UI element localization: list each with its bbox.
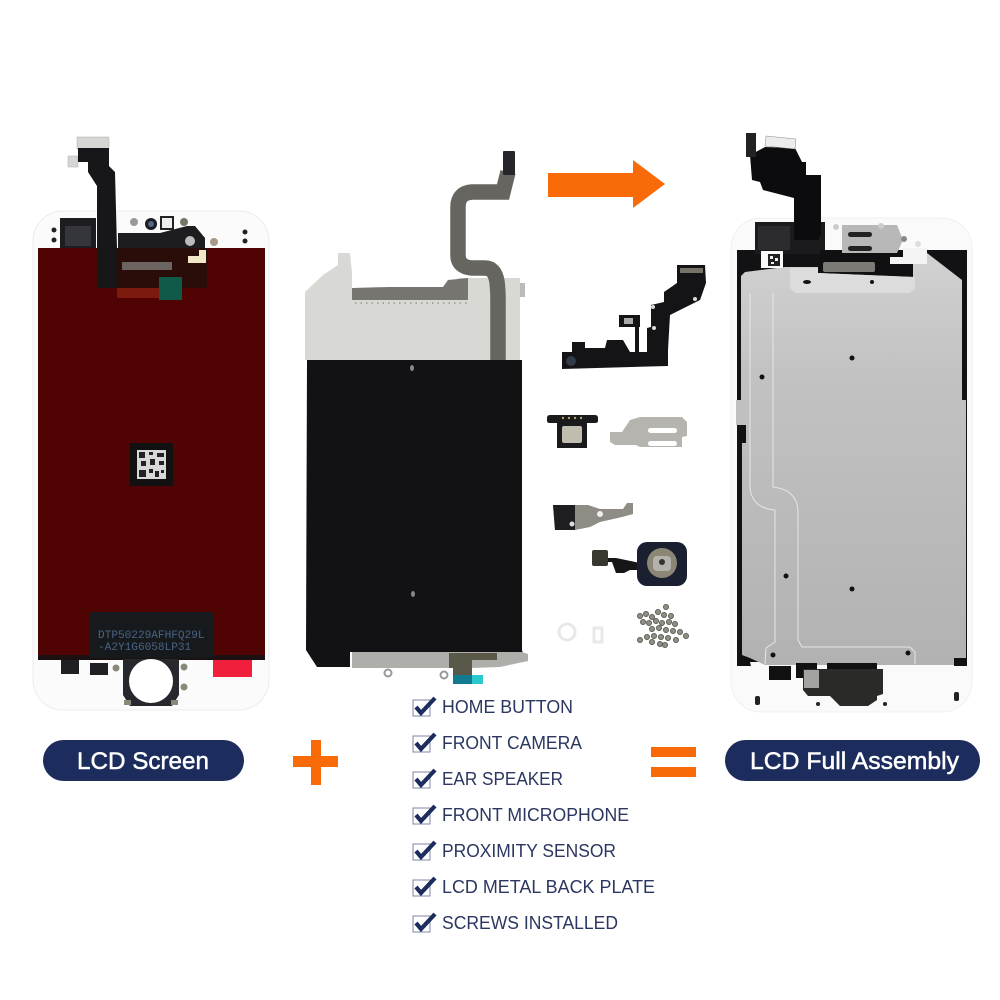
grey flex cable [458, 172, 508, 360]
dotted rivets [355, 302, 467, 304]
green tab [159, 277, 182, 300]
pink tab [213, 660, 252, 677]
home board [803, 669, 883, 706]
panel: LCD full assembly phone [731, 133, 972, 712]
connector [122, 262, 172, 270]
QR label [130, 443, 173, 486]
panel: metal back plate [305, 151, 528, 684]
home button opening [129, 659, 173, 703]
bottom flex [449, 653, 497, 675]
badge: LCD Full Assembly [725, 740, 980, 781]
screws [637, 604, 689, 648]
item: screws installed: SCREWS INSTALLED [442, 913, 618, 933]
serial number label: -A2Y1G6058LP31 [98, 642, 192, 654]
grey inset [352, 278, 468, 300]
front camera flex [562, 265, 706, 369]
textured speaker patch [65, 226, 91, 246]
bottom black blocks [769, 663, 877, 680]
bottom black tabs [61, 660, 108, 675]
plastic ring and frame [559, 624, 602, 642]
panel: loose parts [547, 265, 706, 648]
badge: LCD Screen: LCD Screen [77, 748, 209, 775]
black back area [737, 250, 967, 662]
small screws [112, 664, 188, 705]
home button surround [123, 659, 179, 706]
silver plate [305, 253, 520, 360]
plate holes [410, 365, 415, 597]
teal tab [453, 675, 483, 684]
silver contour lines [750, 293, 915, 664]
bottom ring tabs [384, 670, 448, 678]
flex white connector [765, 136, 796, 149]
textured speaker patch [758, 226, 790, 250]
badge: LCD Full Assembly: LCD Full Assembly [750, 748, 959, 775]
home bracket [553, 503, 633, 530]
home button [592, 542, 687, 586]
bottom black corners [737, 658, 967, 666]
badge: LCD Screen [43, 740, 244, 781]
plus sign [293, 740, 338, 785]
serial number label [90, 612, 213, 658]
top black shield [60, 218, 205, 248]
item: front camera: FRONT CAMERA [442, 733, 582, 753]
small holes [755, 692, 959, 706]
lower flex board [117, 248, 207, 288]
right tab [520, 283, 525, 297]
silver plate [736, 248, 966, 665]
plate holes [760, 280, 910, 658]
panel: LCD screen phone [33, 137, 269, 710]
silver connector [68, 137, 109, 167]
item: LCD metal back plate: LCD METAL BACK PLATE [442, 877, 655, 897]
white tab [188, 250, 206, 263]
metal bracket with slots [610, 417, 687, 447]
middle black area [820, 250, 913, 277]
red strip under board [117, 288, 159, 298]
item: proximity sensor: PROXIMITY SENSOR [442, 841, 616, 861]
phone white frame [731, 218, 972, 712]
bottom black strip [38, 655, 265, 660]
item: front microphone: FRONT MICROPHONE [442, 805, 629, 825]
bottom silver strip [352, 652, 528, 668]
white tab [890, 248, 927, 264]
top black shield [755, 222, 825, 254]
flex connector [503, 151, 515, 175]
checklist [413, 697, 655, 933]
small flex connector [746, 133, 756, 157]
item: ear speaker: EAR SPEAKER [442, 769, 563, 789]
item: home button: HOME BUTTON [442, 697, 573, 717]
black flex cable [78, 148, 117, 288]
black flex cable [750, 147, 821, 240]
red LCD back [38, 248, 265, 659]
phone white frame [33, 211, 269, 710]
barcode sticker [761, 251, 783, 268]
black plate [306, 360, 523, 667]
arrow [548, 160, 665, 208]
serial number label: DTP50229AFHFQ29L [98, 630, 205, 642]
ear speaker [547, 415, 598, 448]
speaker bracket [833, 223, 921, 253]
silver block [804, 670, 819, 688]
grey connector [823, 262, 875, 272]
top camera bracket holes [52, 217, 248, 246]
equals sign [651, 747, 696, 777]
plate top inset [790, 268, 915, 293]
